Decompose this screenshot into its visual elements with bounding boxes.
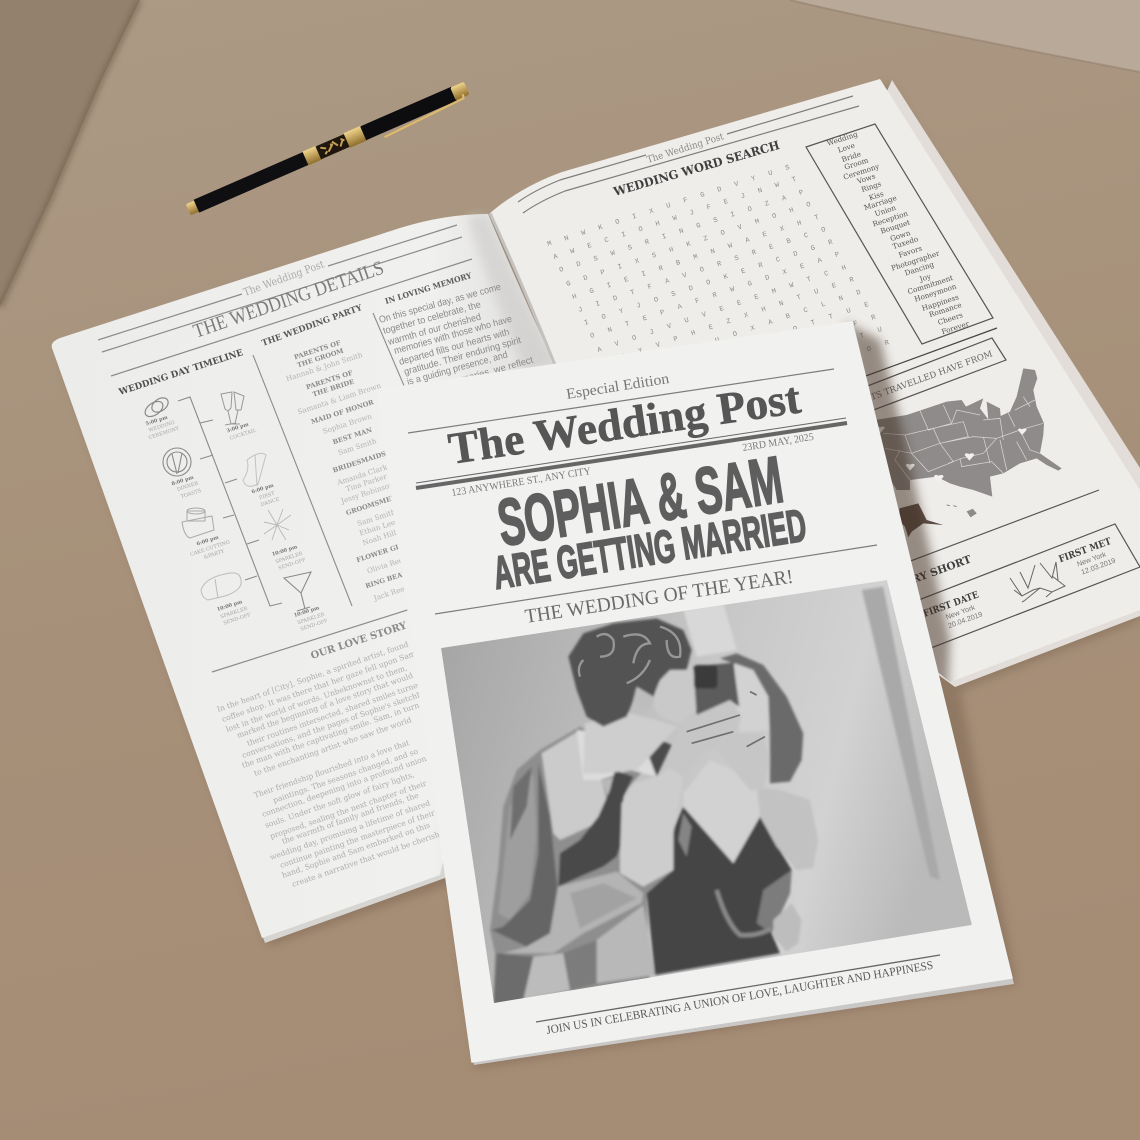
icon: sparkler [264,509,291,540]
love story text: hand, Sophie and Sam embarked on this [281,821,431,880]
tie [558,770,633,887]
icon: champagne glasses [221,392,244,425]
word search grid [546,164,891,434]
love story text: to the enchanting artist who saw the world [253,715,413,778]
word list: Photographer [890,248,941,273]
timeline labels: &PARTY [203,548,226,561]
woman's face [735,663,768,732]
timeline labels: COCKTAIL [229,427,258,442]
timeline labels: SPARKLER [220,606,249,620]
love story text: In the heart of [City], Sophie, a spirited artist, found [216,640,410,714]
heading: in loving memory: IN LOVING MEMORY [384,271,473,306]
wedding party list: PARENTS OF [305,369,354,391]
especial edition: Especial Edition [565,371,671,403]
dress [647,807,792,975]
love story text: the warmth of family and friends, the [281,790,420,846]
word search grid: E H I J O R U O X A B C L N D [608,289,862,381]
heading: wedding day timeline: WEDDING DAY TIMELINE [117,348,245,398]
bottom rule [536,955,940,1022]
shirt [490,727,673,1007]
wedding party list: BEST MAN [332,426,373,446]
wedding party list [285,339,419,603]
icon: two doves [1010,562,1065,602]
timeline labels: DANCE [260,496,281,508]
wedding party list: Amanda Clark [335,462,389,487]
word list box [806,124,993,344]
wedding party list: Samanta & Liam Brown [296,381,383,416]
timeline labels: 3:00 pm [226,421,250,434]
wedding party list: Jack Reed [372,583,410,603]
timeline labels: SPARKLER [297,612,326,626]
first date: FIRST DATE [922,590,980,620]
wedding party list: Ethan Lee [358,518,396,538]
man's cheek [654,668,698,710]
masthead: the wedding post: The Wedding Post [445,373,804,474]
love story text: connection, deepening into a profound union [261,754,428,819]
lower shirt [493,953,533,1007]
wedding party list: Jessy Robinson [339,480,395,506]
love story text: continue painting the masterpiece of their [279,808,436,870]
in loving memory text: On this special day, as we come [378,282,502,326]
wedding party list: FLOWER GIRL [355,540,410,564]
love story text: wedding day, promising a lifetime of shared [269,798,431,862]
timeline labels: 6:00 pm [196,534,220,547]
word list: Dancing [903,260,935,278]
woman's hair [720,653,803,783]
heading: wedding word search: WEDDING WORD SEARCH [611,138,781,199]
timeline labels: SEND-OFF [223,612,252,627]
word list: Reception [871,209,909,229]
first date: New York [944,602,976,621]
word search grid: H G I E I R B M N W A E X H T [571,214,820,302]
in loving memory text: departed fills our hearts with [398,327,511,368]
word search grid: I O Y J O S D O K E R C D G R [583,238,835,328]
wedding party list: THE BRIDE [312,378,355,399]
timeline labels: 5:00 pm [145,414,169,427]
word list: Commitment [906,273,954,296]
timeline labels: DINNER [176,480,199,493]
wedding party list: PARENTS OF [293,339,342,361]
closing line: JOIN US IN CELEBRATING A UNION OF LOVE, LAUGHTER AND HAPPINESS [545,958,934,1037]
timeline labels: 8:00 pm [171,474,195,487]
waist hand [773,903,802,952]
icon: first dance [243,453,266,486]
wedding party list: GROOMSMEN [345,493,398,517]
timeline labels: TOASTS [180,488,203,500]
timeline labels: 10:00 pm [293,605,321,619]
word list: Bouquet [879,218,911,236]
word list: Vows [855,171,877,186]
word list: Wedding [826,129,859,148]
love story text: souls. Under the soft glow of fairy lights, [264,770,416,830]
rule above love story [212,598,445,672]
word list: Union [873,203,897,218]
word list [826,129,971,336]
first met: FIRST MET [1057,536,1113,565]
icon: wedding cake [182,508,214,538]
in loving memory text [378,282,535,397]
word search grid: J I D T F A V O R S R E B C O [577,226,827,315]
word list: Tuxedo [891,234,919,251]
timeline labels: SEND-OFF [278,557,307,572]
heading: our story short: OUR STORY SHORT [858,553,973,605]
wedding party list: Tina Parker [345,472,388,493]
love story text: paintings. The seasons changed, and so [272,746,420,805]
first date: 20.04.2019 [947,609,984,630]
header rules [518,96,859,213]
word search grid: E C N A M O R E S S O T T U E [614,301,870,394]
photo: couple kissing mirror selfie [441,580,972,1007]
word list: Groom [843,155,870,172]
love story text: create a narrative that would be cherished [291,827,450,889]
love story text [216,640,450,889]
word list: Happiness [921,292,960,313]
rule under word list [800,328,997,400]
heading: our love story: OUR LOVE STORY [310,620,409,662]
word search grid: O N T E P A F R W G D X E A P [589,251,841,341]
icon: black and gold pen [185,81,472,221]
first met: New York [1076,549,1108,568]
panel: first date and first met box [880,524,1140,660]
icon: martini glass [284,572,311,611]
panel: left inner page, the wedding details [52,214,555,943]
running head: The Wedding Post [242,258,327,299]
timeline labels: 10:00 pm [216,599,244,613]
rule [435,545,877,614]
first met [1057,536,1119,582]
word search grid: G D P I X S H K Z O V M O H O [565,201,812,289]
word search grid: G K Y V P H E Z X H N T U E R [602,276,856,368]
word list: Kiss [868,189,885,202]
timeline labels: FIRST [259,491,276,501]
love story text: lost in the world of words. Unbeknownst to them, [225,663,408,734]
word list: Gown [889,228,912,243]
wedding party list: Noah Hill [361,528,398,547]
word search grid: O D S W S R I N G S I O Z A P [558,189,805,275]
timeline labels: CEREMONY [148,425,181,441]
in loving memory text: is a guiding presence, and [406,349,509,388]
in loving memory text: gratitude. Their enduring spirit [403,335,523,378]
word list: Marriage [863,193,898,212]
timeline labels: SPARKLER [275,551,304,565]
timeline labels: CAKE CUTTING [189,539,231,558]
word list: Romance [928,300,963,319]
first date [922,590,986,637]
icon: rings [142,395,171,420]
icon: getaway car [201,573,241,600]
masthead rules [416,418,847,488]
in loving memory text: memories with those who have [393,314,513,357]
timeline labels [143,412,329,633]
word list: Ceremony [842,161,881,182]
forearm [620,763,683,887]
word search grid: M N W K O I X U F G D V Y U S [546,164,791,249]
headline getting married: ARE GETTING MARRIED [490,499,810,599]
running head: The Wedding Post [646,131,725,166]
heading: guests travelled: WHERE OUR GUESTS TRAVELLED HAVE FROM [787,349,994,433]
phone [693,663,739,715]
heading: the wedding party: THE WEDDING PARTY [261,303,364,349]
wedding party list: RING BEARER [364,566,419,590]
love story text: Their friendship flourished into a love that [253,738,410,800]
in loving memory text: together to celebrate, the [382,299,482,337]
timeline labels: 6:00 pm [251,482,275,495]
headline names: SOPHIA & SAM [493,442,788,560]
word list: Bride [840,149,862,164]
icon: dinner plate [163,448,191,476]
in loving memory text: warmth of our cherished [386,312,482,348]
love story text: marked the beginning of a love story that would [236,671,414,740]
word list: Joy [918,271,933,284]
chest [683,760,760,863]
timeline labels: 10:00 pm [271,544,299,558]
guests heading box [800,338,1006,434]
panel: right inner page, word search and map [490,79,1140,690]
word search grid: R K T P E C E R S N A L B F R [620,314,878,407]
word list: Cheers [937,310,964,327]
fold shadow from cover [845,322,950,690]
woman's arm [757,787,818,870]
wedding party list: THE GROOM [296,347,345,369]
word list: Rings [860,179,883,194]
word list: Honeymoon [913,281,958,304]
word search grid: V W A B C D E F G H I K L O R [633,339,891,434]
wedding party list: MAID OF HONOR [310,398,375,426]
word list: Love [837,141,856,155]
subheading: THE WEDDING OF THE YEAR! [523,566,795,628]
word list: Forever [940,319,971,336]
love story text: coffee shop. It was there that her gaze fell upon Sam [221,649,417,724]
word list: Favors [897,243,923,260]
word search grid: A V O J V U V E E E M W T C H [596,264,847,355]
first met: 12.03.2019 [1080,556,1117,576]
timeline labels: WEDDING [148,420,176,434]
love story text: conversations, and the pages of Sophie's sketchbook [241,685,436,760]
rolled sleeve [503,872,643,953]
in loving memory text: in their memories, we reflect [418,355,535,397]
map: USA with hearts [875,368,1062,537]
man's neck [583,713,677,773]
column dividers [253,313,405,606]
woman's hand [740,775,756,789]
address: 123 ANYWHERE ST., ANY CITY [451,466,592,499]
love story text: the man with the captivating smile. Sam, in turn [241,701,420,770]
header rules [98,225,472,376]
date: 23RD MAY, 2025 [742,432,815,454]
love story text: their routines intersected, shared smiles turned [246,679,424,748]
word search grid: A W E C I O H W J F E J N W T [552,176,798,262]
heading: the wedding details: THE WEDDING DETAILS [190,257,387,343]
timeline connector [178,397,282,606]
top rule [408,369,834,433]
rule below map [860,490,1099,580]
man's hand [697,700,740,719]
wedding party list: Sophia Brown [321,411,373,436]
word search grid: T J S D Y L M N O P Q R S T U [627,326,883,421]
wedding party list: BRIDESMAIDS [332,450,387,474]
love story text: proposed, sealing the next chapter of their [269,779,428,841]
panel: front cover page [377,322,1014,1065]
wedding party list: Sam Smith [337,436,378,457]
man's hair [568,618,692,727]
wedding party list: Hannah & John Smith [285,350,364,383]
wedding party list: Sam Smith [356,507,397,528]
timeline labels: SEND-OFF [300,618,329,633]
wedding party list: Olivia Reed [366,554,409,575]
